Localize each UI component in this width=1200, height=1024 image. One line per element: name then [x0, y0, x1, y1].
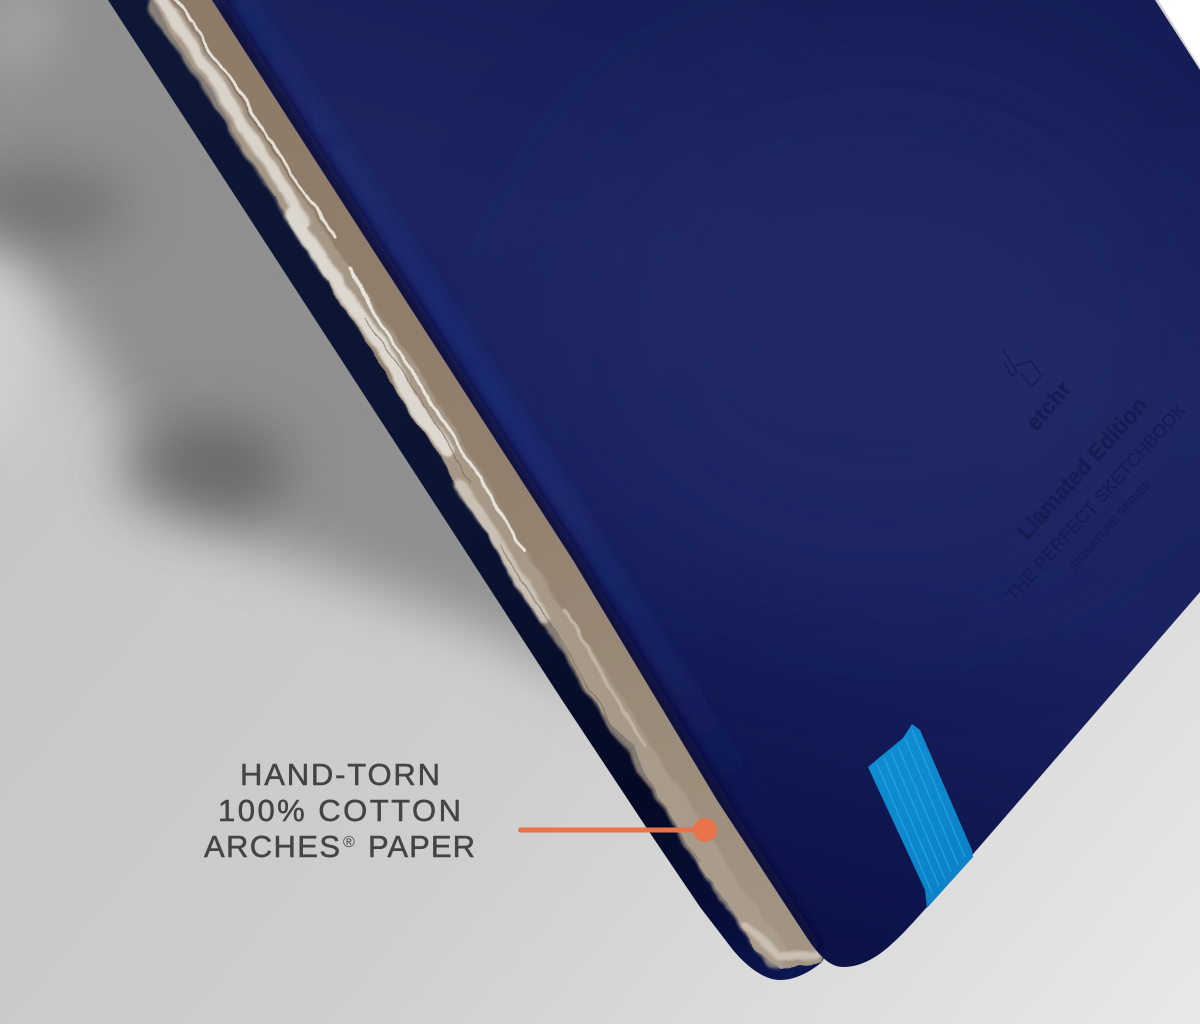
- embossed cover logo and title: THE PERFECT SKETCHBOOK: [1002, 400, 1190, 605]
- icon: llama logo: [1003, 350, 1041, 387]
- embossed cover logo and title: etchr: [1021, 376, 1076, 435]
- callout: paper label: [204, 757, 717, 864]
- callout leader line and dot: [518, 818, 717, 842]
- callout text: ®: [343, 834, 355, 851]
- callout text: 100% COTTON: [218, 793, 461, 828]
- callout text: PAPER: [368, 829, 475, 864]
- embossed cover logo and title: SIGNATURE SERIES: [1068, 479, 1153, 573]
- hand-torn paper edge: [140, 0, 822, 968]
- callout text: [204, 757, 475, 864]
- blue elastic strap: [868, 724, 973, 908]
- front cover: [212, 0, 1200, 967]
- back cover: [108, 0, 850, 980]
- callout text: HAND-TORN: [240, 757, 440, 792]
- callout text: ARCHES: [204, 829, 340, 864]
- embossed cover logo and title: Llamated Edition: [1011, 392, 1152, 544]
